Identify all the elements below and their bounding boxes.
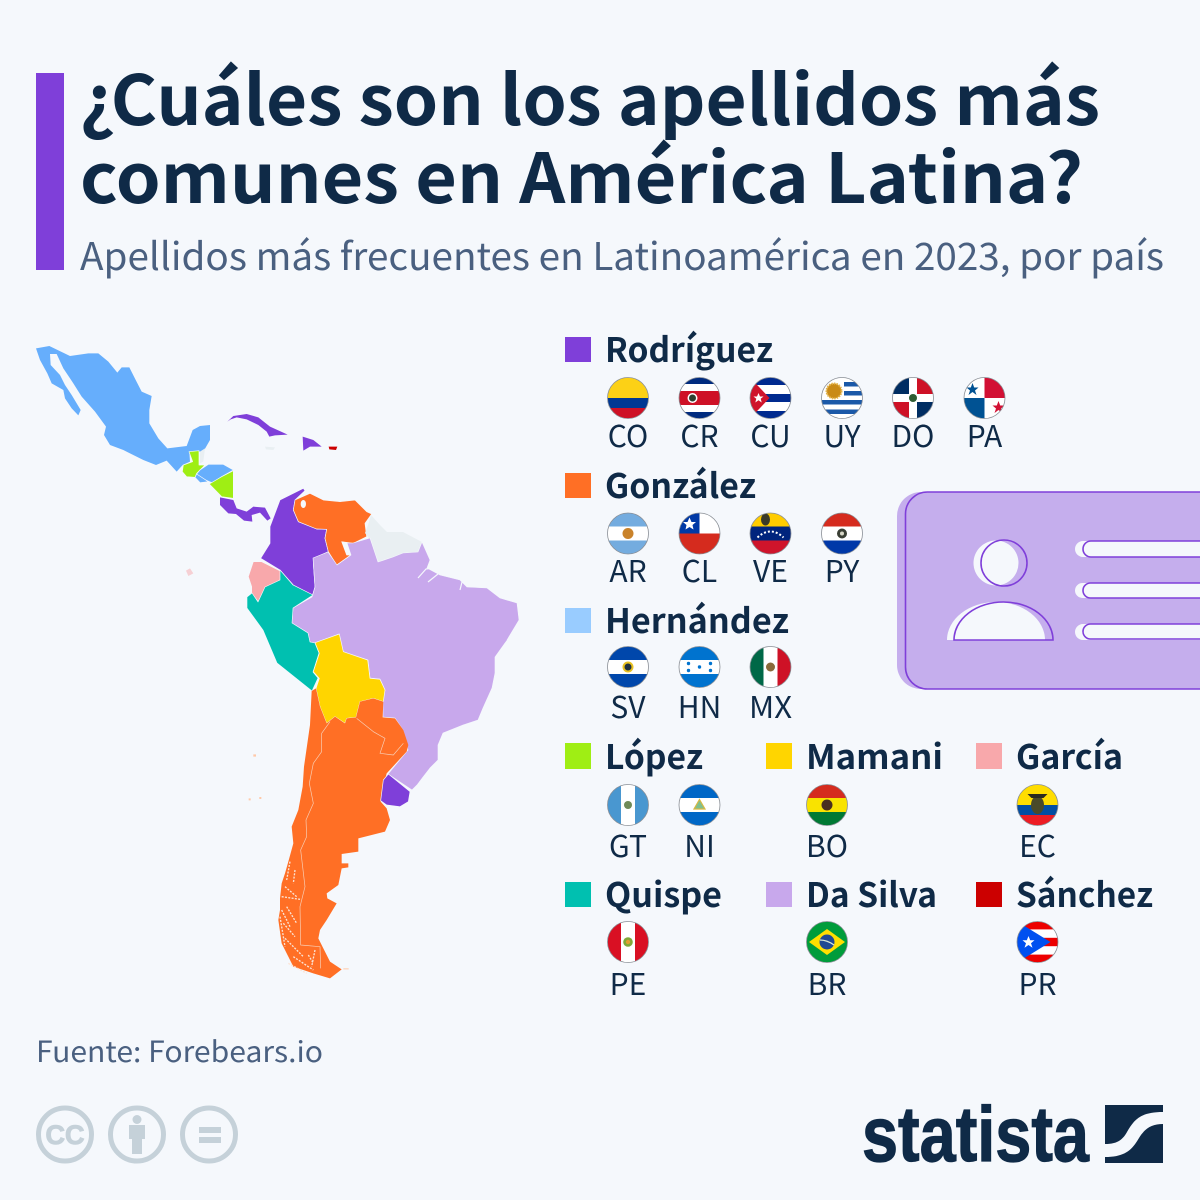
country: Mexico bbox=[36, 346, 210, 472]
flag: Brazil bbox=[806, 921, 848, 963]
flag: Chile bbox=[678, 512, 720, 554]
code: SV: SV bbox=[610, 683, 646, 727]
person icon bbox=[947, 540, 1053, 640]
flag: El Salvador bbox=[607, 646, 649, 688]
code: EC: EC bbox=[1019, 822, 1056, 866]
legend: Sánchez: Sánchez bbox=[1016, 868, 1153, 917]
legend: González bbox=[565, 466, 863, 582]
legend: Quispe: Quispe bbox=[605, 868, 722, 917]
flag: Ecuador bbox=[1016, 784, 1058, 826]
legend: Rodríguez bbox=[565, 330, 1006, 448]
icon: ID card bbox=[897, 492, 1200, 689]
code: UY: UY bbox=[823, 412, 861, 456]
code: HN: HN bbox=[678, 683, 721, 727]
subtitle: Apellidos más frecuentes en Latinoamérica en 2023, por país bbox=[80, 226, 1164, 281]
title bbox=[80, 45, 1100, 223]
flag: Bolivia bbox=[806, 784, 848, 826]
legend: Mamani: Mamani bbox=[806, 730, 943, 779]
flag: Uruguay bbox=[821, 377, 864, 419]
country: Peru bbox=[247, 570, 319, 691]
legend: Hernández: Hernández bbox=[605, 594, 789, 643]
flag: Argentina bbox=[607, 512, 649, 554]
region: Southern Cone bbox=[249, 634, 410, 978]
legend: Sánchez bbox=[976, 876, 1152, 995]
flag: Cuba bbox=[750, 377, 792, 419]
map of Latin America bbox=[36, 346, 519, 978]
title: ¿Cuáles son los apellidos más bbox=[80, 45, 1100, 145]
legend: Rodríguez: Rodríguez bbox=[605, 323, 773, 372]
code: PE: PE bbox=[610, 960, 646, 1004]
code: PR: PR bbox=[1018, 960, 1057, 1004]
flag: Panama bbox=[964, 377, 1006, 419]
code: AR: AR bbox=[609, 547, 647, 591]
code: BR: BR bbox=[808, 960, 846, 1004]
legend: Quispe bbox=[565, 880, 720, 995]
code: CL: CL bbox=[682, 547, 717, 591]
source: Fuente: Forebears.io bbox=[36, 1029, 323, 1071]
code: VE: VE bbox=[753, 547, 788, 591]
code: DO: DO bbox=[892, 412, 934, 456]
legend: López: López bbox=[605, 730, 703, 779]
country: Guianas bbox=[365, 515, 422, 562]
legend: López bbox=[565, 738, 720, 858]
flag: Nicaragua bbox=[678, 784, 720, 826]
accent bar bbox=[36, 73, 64, 270]
code: NI: NI bbox=[684, 822, 715, 866]
logo: Statista: statista bbox=[862, 1090, 1090, 1178]
flag: Honduras bbox=[678, 646, 720, 688]
logo mark bbox=[1105, 1105, 1163, 1163]
legend: Da Silva: Da Silva bbox=[806, 868, 937, 917]
flag: Paraguay bbox=[821, 512, 863, 554]
flag: Puerto Rico bbox=[1016, 921, 1058, 963]
legend: Hernández bbox=[565, 602, 792, 718]
code: CO: CO bbox=[608, 412, 648, 456]
flag: Dominican Republic bbox=[892, 377, 934, 419]
legend: Da Silva bbox=[766, 880, 935, 995]
legend: García: García bbox=[1016, 730, 1123, 779]
code: CU: CU bbox=[750, 412, 791, 456]
legend: Mamani bbox=[766, 742, 941, 858]
code: MX: MX bbox=[749, 683, 792, 727]
code: BO: BO bbox=[806, 822, 848, 866]
flag: Venezuela bbox=[750, 512, 792, 554]
icon: license CC BY ND bbox=[38, 1108, 236, 1161]
title: comunes en América Latina? bbox=[80, 123, 1083, 223]
legend: González: González bbox=[605, 459, 756, 508]
flag: Colombia bbox=[607, 377, 649, 419]
code: GT: GT bbox=[609, 822, 647, 866]
code: PA: PA bbox=[967, 412, 1003, 456]
flag: Peru bbox=[607, 921, 649, 963]
icon: license CC BY ND: CC bbox=[46, 1120, 84, 1150]
flag: Mexico bbox=[750, 646, 792, 688]
flag: Costa Rica bbox=[678, 377, 720, 419]
code: PY: PY bbox=[825, 547, 859, 591]
decorative river mouth bbox=[418, 568, 462, 590]
region: Central America, Caribbean and northern Andes bbox=[182, 414, 372, 602]
legend: García bbox=[976, 738, 1121, 858]
code: CR: CR bbox=[680, 412, 719, 456]
flag: Guatemala bbox=[607, 784, 649, 826]
text lines bbox=[1075, 541, 1200, 640]
country: Brazil bbox=[292, 538, 519, 790]
